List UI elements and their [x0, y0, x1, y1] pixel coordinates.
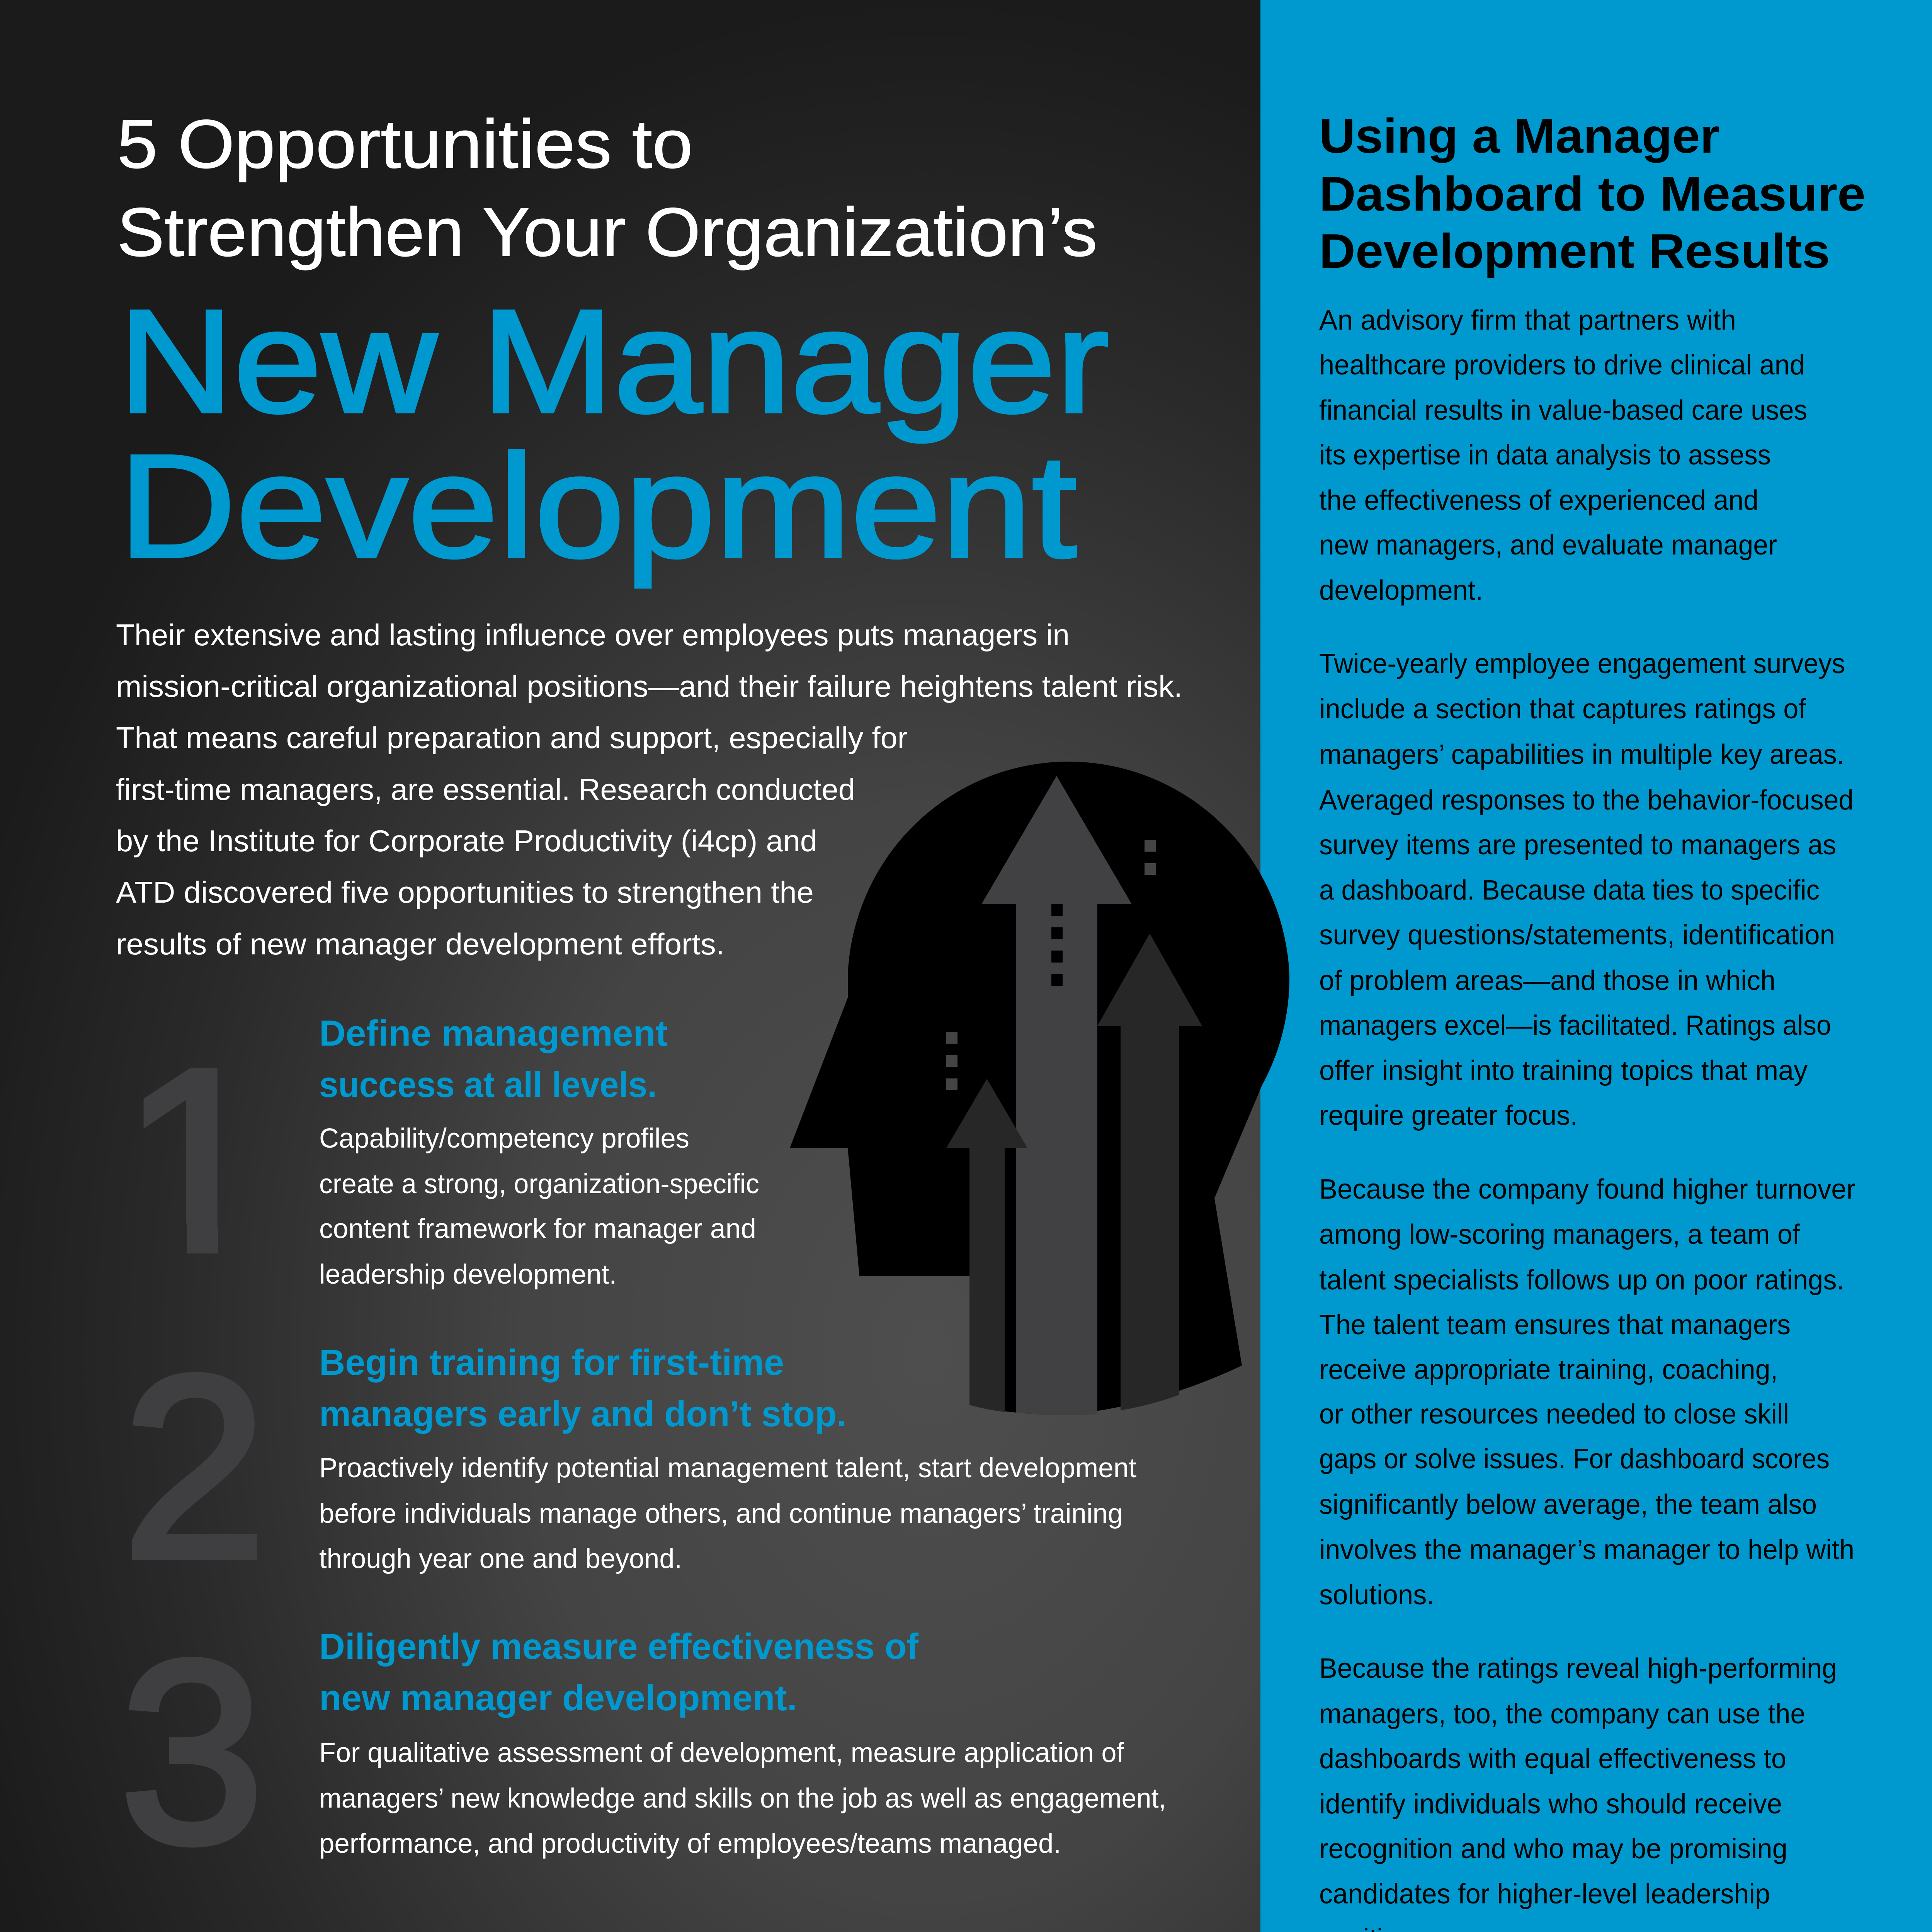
right column paragraph 3: Because the company found higher turnover [1319, 1174, 1855, 1205]
right column paragraph 1 [1319, 305, 1807, 606]
right column heading [1319, 109, 1866, 278]
step 3 body: performance, and productivity of employees/teams managed. [319, 1828, 1061, 1859]
step 2 heading: managers early and don’t stop. [319, 1393, 847, 1434]
right column paragraph 2: of problem areas—and those in which [1319, 965, 1776, 996]
step 3 body: For qualitative assessment of development, measure application of [319, 1738, 1124, 1768]
right column paragraph 3: receive appropriate training, coaching, [1319, 1354, 1778, 1385]
title: New Manager Development: New Manager [119, 279, 1109, 444]
intro paragraph: mission-critical organizational positions—and their failure heightens talent risk. [116, 669, 1182, 703]
right column paragraph 3: among low-scoring managers, a team of [1319, 1219, 1800, 1250]
large centre arrow [981, 776, 1132, 1415]
intro paragraph: first-time managers, are essential. Research conducted [116, 772, 855, 806]
right column paragraph 4: managers, too, the company can use the [1319, 1699, 1805, 1730]
step 2 body [319, 1453, 1136, 1574]
right column paragraph 1: healthcare providers to drive clinical and [1319, 350, 1805, 381]
title: New Manager Development: Development [119, 424, 1077, 589]
intro paragraph: That means careful preparation and support, especially for [116, 721, 908, 755]
title: New Manager Development [119, 279, 1109, 589]
right column paragraph 3: solutions. [1319, 1580, 1434, 1611]
right column paragraph 4: recognition and who may be promising [1319, 1833, 1787, 1864]
right column paragraph 3: gaps or solve issues. For dashboard scores [1319, 1444, 1830, 1475]
intro paragraph: results of new manager development efforts. [116, 927, 724, 961]
intro paragraph: by the Institute for Corporate Productivity (i4cp) and [116, 824, 817, 858]
right column paragraph 1: its expertise in data analysis to assess [1319, 440, 1771, 471]
step 3: measure effectiveness [319, 1626, 1166, 1859]
title: 5 opportunities kicker: 5 Opportunities to [117, 105, 693, 182]
step 3 numeral: 3 [120, 1607, 264, 1897]
step 3 body [319, 1738, 1166, 1859]
right column heading: Using a Manager [1319, 109, 1719, 163]
step 3 heading [319, 1626, 919, 1718]
step 1 body: content framework for manager and [319, 1214, 756, 1244]
right column paragraph 2: a dashboard. Because data ties to specific [1319, 875, 1820, 906]
right column heading: Dashboard to Measure [1319, 167, 1866, 221]
step 1 numeral: 1 [121, 1015, 273, 1305]
right column paragraph 2 [1319, 648, 1854, 1131]
right column paragraph 3: talent specialists follows up on poor ratings. [1319, 1265, 1844, 1296]
right column paragraph 2: managers’ capabilities in multiple key areas. [1319, 739, 1844, 770]
title: 5 opportunities kicker [117, 105, 1097, 270]
centre arrow squares [1051, 904, 1063, 986]
upper right squares [1145, 840, 1156, 875]
right column paragraph 3: involves the manager’s manager to help with [1319, 1534, 1854, 1565]
intro paragraph: Their extensive and lasting influence over employees puts managers in [116, 618, 1070, 652]
right column paragraph 4: dashboards with equal effectiveness to [1319, 1743, 1786, 1774]
step 3 heading: Diligently measure effectiveness of [319, 1626, 919, 1667]
step 1 body: leadership development. [319, 1259, 617, 1290]
step 1 body [319, 1123, 759, 1290]
step 3 heading: new manager development. [319, 1677, 797, 1718]
right column paragraph 3 [1319, 1174, 1855, 1611]
step 2 body: through year one and beyond. [319, 1544, 682, 1574]
step 1 body: Capability/competency profiles [319, 1123, 689, 1154]
step 1: define management success [319, 1013, 759, 1290]
right column paragraph 2: offer insight into training topics that may [1319, 1055, 1808, 1086]
right column paragraph 2: survey questions/statements, identification [1319, 920, 1835, 951]
right column paragraph 4 [1319, 1653, 1837, 1932]
step 2 body: Proactively identify potential management talent, start development [319, 1453, 1136, 1483]
right column paragraph 2: Averaged responses to the behavior-focused [1319, 785, 1854, 816]
step 1 heading [319, 1013, 668, 1105]
right column paragraph 4: candidates for higher-level leadership [1319, 1879, 1770, 1910]
right column paragraph 4: identify individuals who should receive [1319, 1789, 1782, 1820]
small left arrow [946, 1079, 1027, 1412]
intro paragraph [116, 618, 1182, 961]
step 2 body: before individuals manage others, and continue managers’ training [319, 1498, 1123, 1529]
right column paragraph 1: the effectiveness of experienced and [1319, 485, 1759, 516]
step 2 heading: Begin training for first-time [319, 1342, 784, 1383]
left squares [946, 1032, 957, 1090]
step 2: begin training early [319, 1342, 1136, 1574]
panel: blue right background [1260, 0, 1932, 1932]
right column paragraph 3: or other resources needed to close skill [1319, 1399, 1789, 1430]
step 2 heading [319, 1342, 847, 1434]
intro paragraph: ATD discovered five opportunities to strengthen the [116, 875, 814, 909]
right column paragraph 4: Because the ratings reveal high-performing [1319, 1653, 1837, 1684]
right column paragraph 2: Twice-yearly employee engagement surveys [1319, 648, 1845, 679]
head silhouette [790, 762, 1289, 1415]
step 3 body: managers’ new knowledge and skills on the job as well as engagement, [319, 1783, 1166, 1814]
right column paragraph 1: new managers, and evaluate manager [1319, 530, 1777, 561]
step 1 heading: Define management [319, 1013, 668, 1053]
right column heading: Development Results [1319, 224, 1830, 278]
right column paragraph 1: financial results in value-based care uses [1319, 395, 1807, 426]
right column paragraph 3: significantly below average, the team also [1319, 1489, 1817, 1520]
right column paragraph 2: require greater focus. [1319, 1100, 1578, 1131]
right column paragraph 3: The talent team ensures that managers [1319, 1310, 1791, 1340]
right column paragraph 2: survey items are presented to managers as [1319, 830, 1836, 861]
right arrow [1097, 934, 1202, 1410]
right column paragraph 2: include a section that captures ratings of [1319, 694, 1806, 724]
right column paragraph 1: development. [1319, 575, 1483, 606]
step 1 body: create a strong, organization-specific [319, 1169, 759, 1199]
right column paragraph 1: An advisory firm that partners with [1319, 305, 1736, 336]
step 2 numeral: 2 [122, 1322, 267, 1612]
step 1 heading: success at all levels. [319, 1064, 657, 1105]
title: 5 opportunities kicker: Strengthen Your Organization’s [117, 194, 1097, 270]
right column paragraph 2: managers excel—is facilitated. Ratings also [1319, 1010, 1831, 1041]
icon: head silhouette with rising arrows [790, 762, 1289, 1415]
panel: dark left background [0, 0, 1260, 1932]
